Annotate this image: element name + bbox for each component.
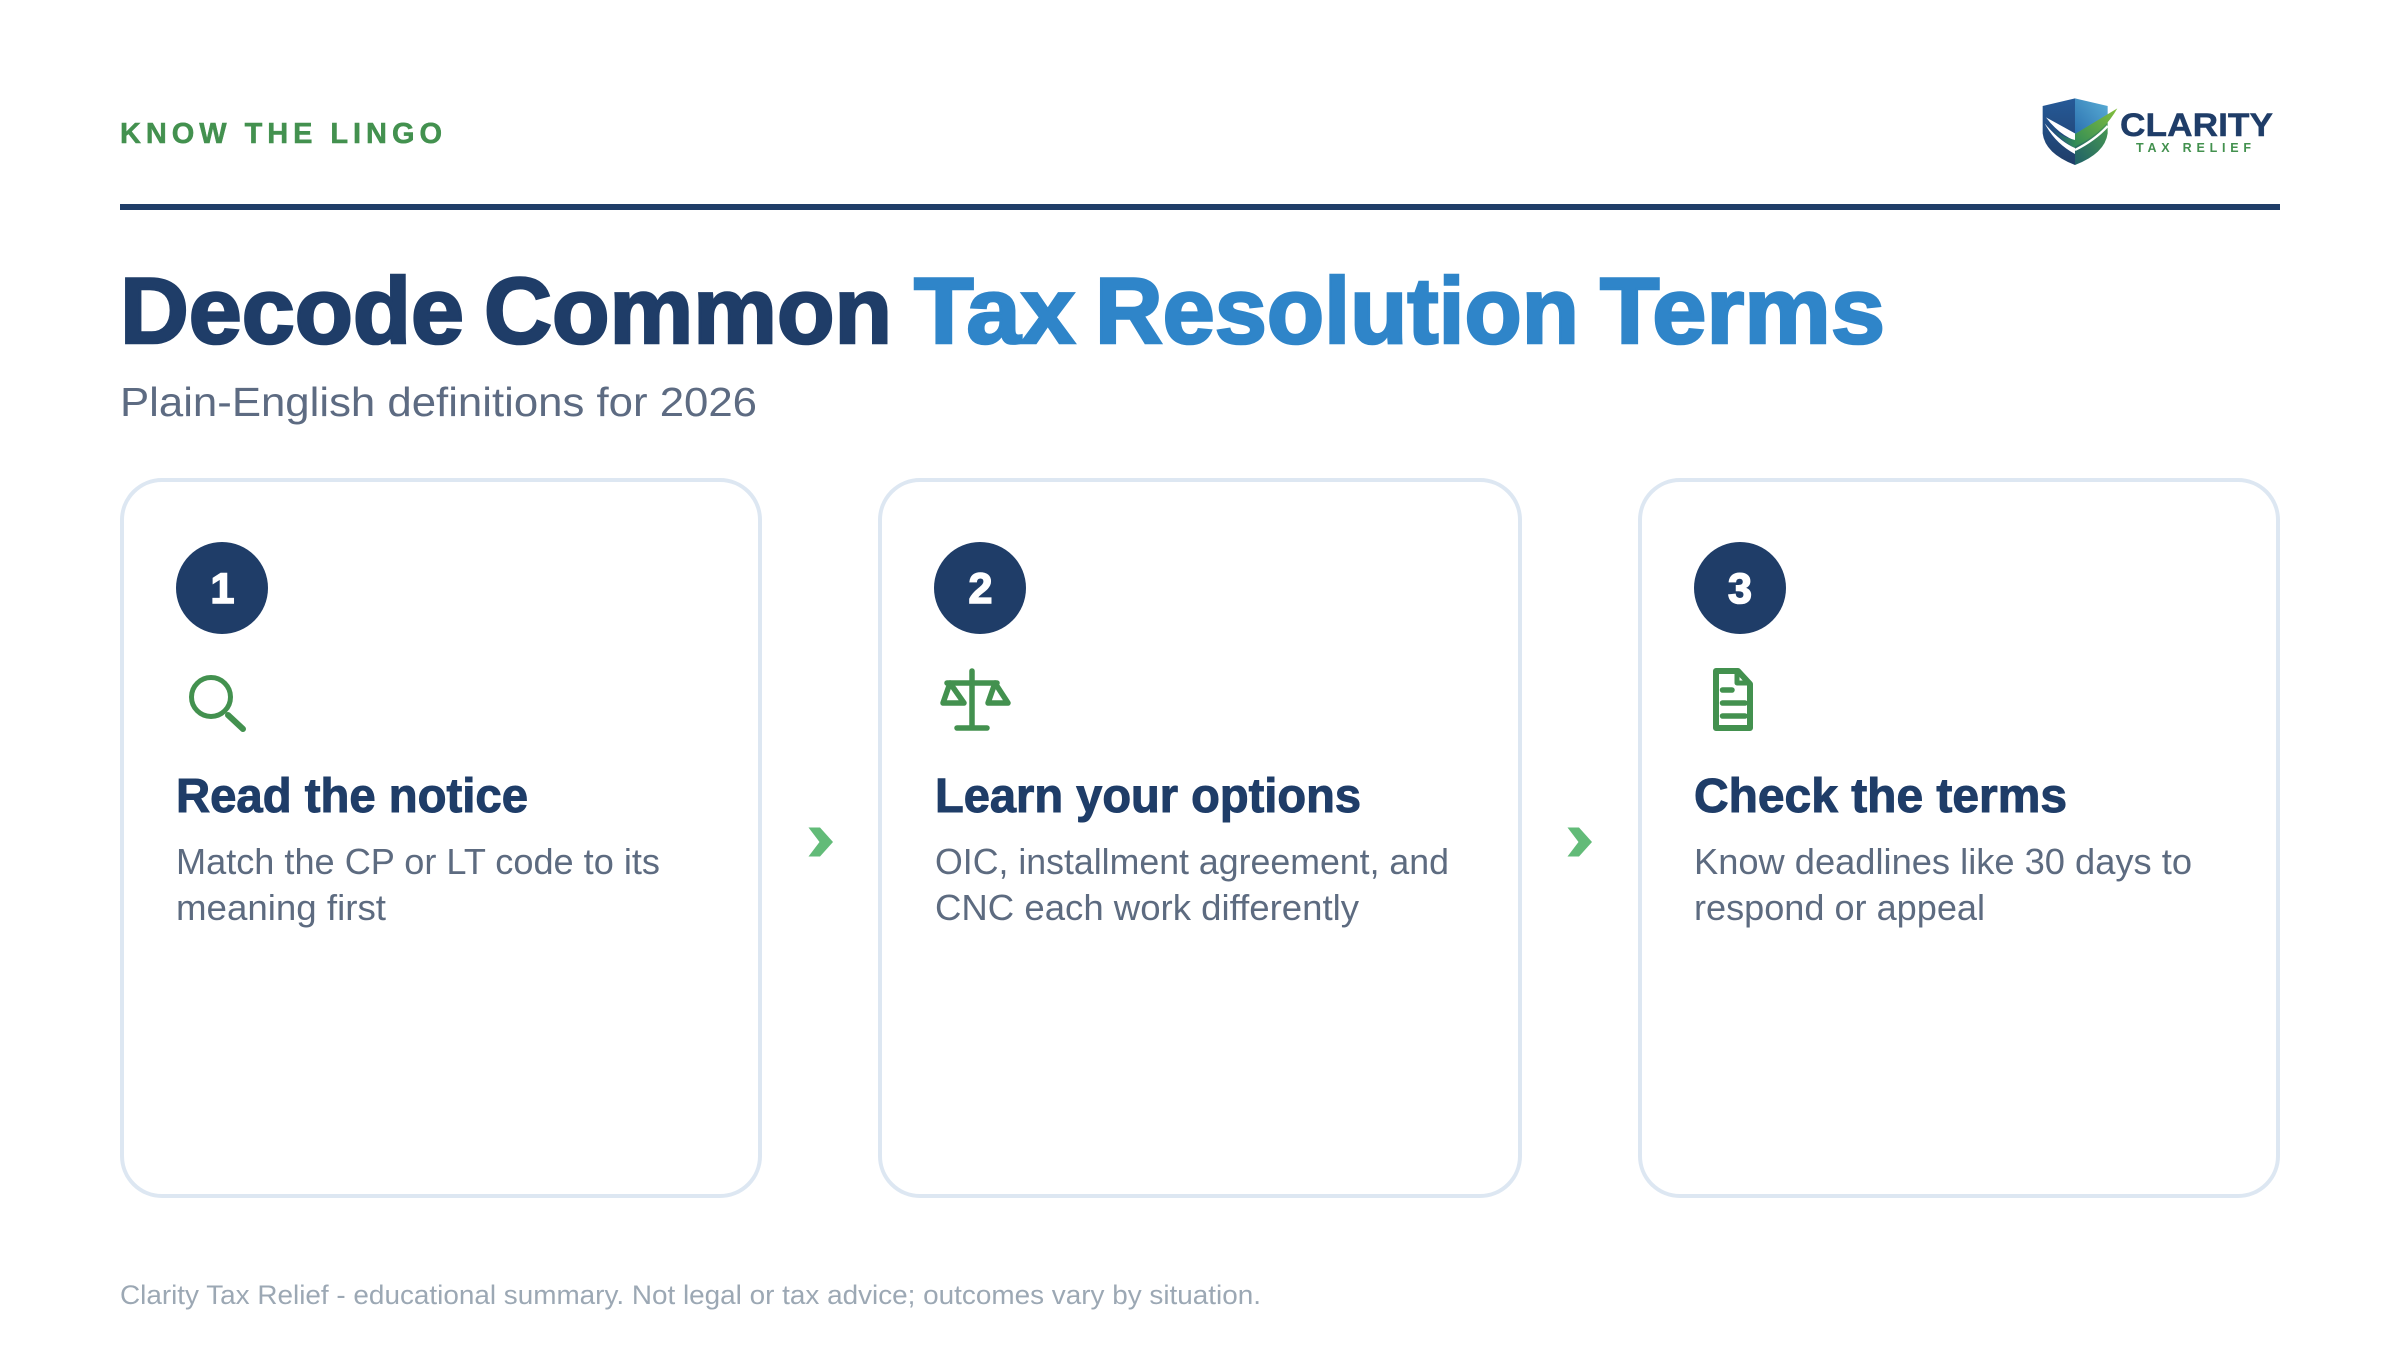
- step number 3: 3: [1728, 565, 1752, 613]
- step 1 description: meaning first: [176, 887, 386, 928]
- footer disclaimer: Clarity Tax Relief - educational summary. Not legal or tax advice; outcomes vary by situation.: [120, 1280, 1261, 1310]
- logo: Clarity Tax Relief: CLARITY: [2120, 107, 2273, 143]
- step 2 description: [935, 841, 1449, 928]
- step 2 heading: Learn your options: [935, 770, 1361, 823]
- step number 1: [176, 542, 268, 634]
- step 1 description: [176, 841, 660, 928]
- step number 3: [1694, 542, 1786, 634]
- title: [120, 258, 1885, 363]
- panel: step 2 learn your options: [880, 480, 1520, 1196]
- logo: Clarity Tax Relief: [2043, 98, 2273, 165]
- logo: Clarity Tax Relief: TAX RELIEF: [2136, 141, 2251, 155]
- title: Common: [484, 258, 892, 363]
- eyebrow label: KNOW THE LINGO: [120, 118, 442, 150]
- title: Terms: [1600, 258, 1885, 363]
- header rule: [120, 204, 2280, 210]
- step 1 heading: Read the notice: [176, 770, 528, 823]
- step 3 description: [1694, 841, 2192, 928]
- title: Tax: [914, 258, 1075, 363]
- step number 1: 1: [211, 565, 234, 613]
- step 3 description: Know deadlines like 30 days to: [1694, 841, 2192, 882]
- icon: balance scales: [943, 671, 1008, 728]
- step 1 description: Match the CP or LT code to its: [176, 841, 660, 882]
- title: Decode: [120, 258, 464, 363]
- subtitle: Plain-English definitions for 2026: [120, 379, 757, 425]
- panel: step 1 read the notice: [122, 480, 760, 1196]
- arrow: step 2 to 3: [1568, 828, 1592, 856]
- icon: document: [1716, 671, 1750, 728]
- arrow: step 1 to 2: [808, 828, 833, 856]
- step 2 description: OIC, installment agreement, and: [935, 841, 1449, 882]
- panel: step 3 check the terms: [1640, 480, 2278, 1196]
- step 2 description: CNC each work differently: [935, 887, 1359, 928]
- step number 2: [934, 542, 1026, 634]
- icon: magnifying glass: [192, 678, 243, 729]
- step 3 heading: Check the terms: [1694, 770, 2067, 823]
- title: Resolution: [1095, 258, 1579, 363]
- step 3 description: respond or appeal: [1694, 887, 1985, 928]
- step number 2: 2: [969, 565, 992, 613]
